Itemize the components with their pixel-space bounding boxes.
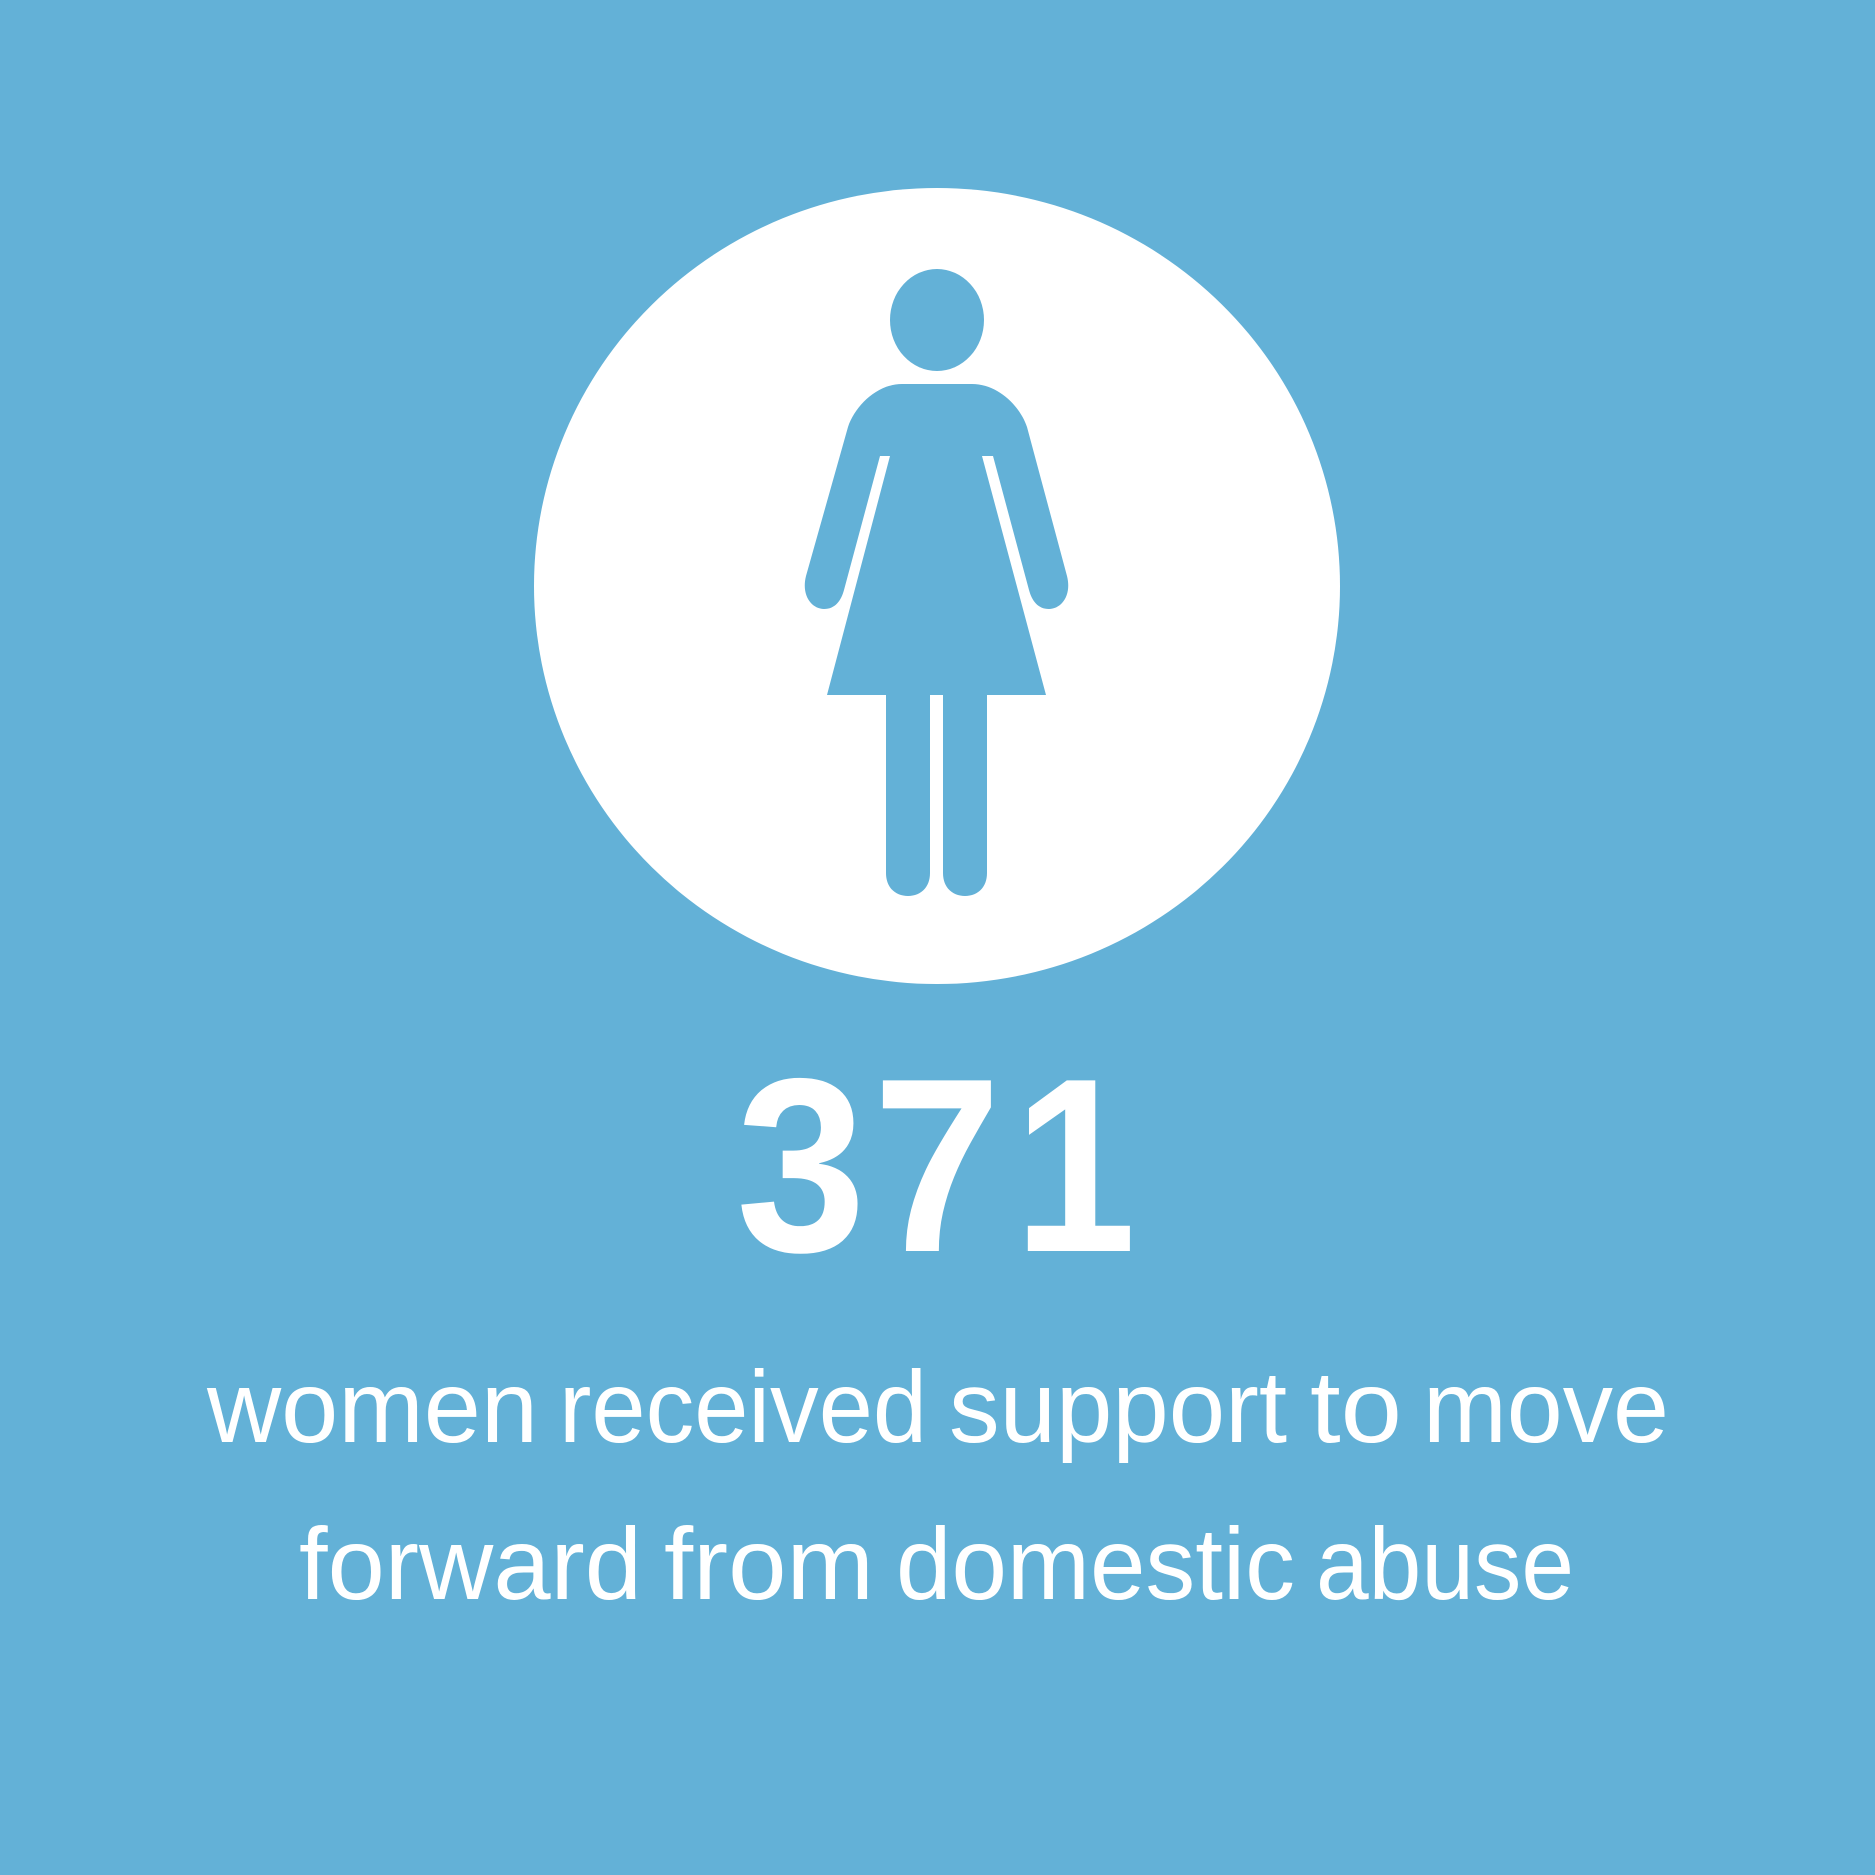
icon: head — [890, 269, 984, 371]
caption text: to — [1310, 1350, 1402, 1464]
caption text — [206, 1350, 1669, 1621]
icon: woman in white circle — [534, 188, 1340, 984]
big number: 3 — [736, 1026, 866, 1304]
caption text: abuse — [1316, 1507, 1574, 1621]
big number: 7 — [873, 1026, 1001, 1304]
caption text: received — [559, 1350, 927, 1464]
caption text: forward — [299, 1507, 642, 1621]
big number: 1 — [1014, 1026, 1136, 1304]
caption text: from — [664, 1507, 874, 1621]
caption text: move — [1423, 1350, 1669, 1464]
caption text: support — [949, 1350, 1287, 1464]
caption text: domestic — [896, 1507, 1295, 1621]
icon: body — [805, 384, 1068, 896]
big number — [736, 1026, 1136, 1304]
caption text: women — [206, 1350, 538, 1464]
